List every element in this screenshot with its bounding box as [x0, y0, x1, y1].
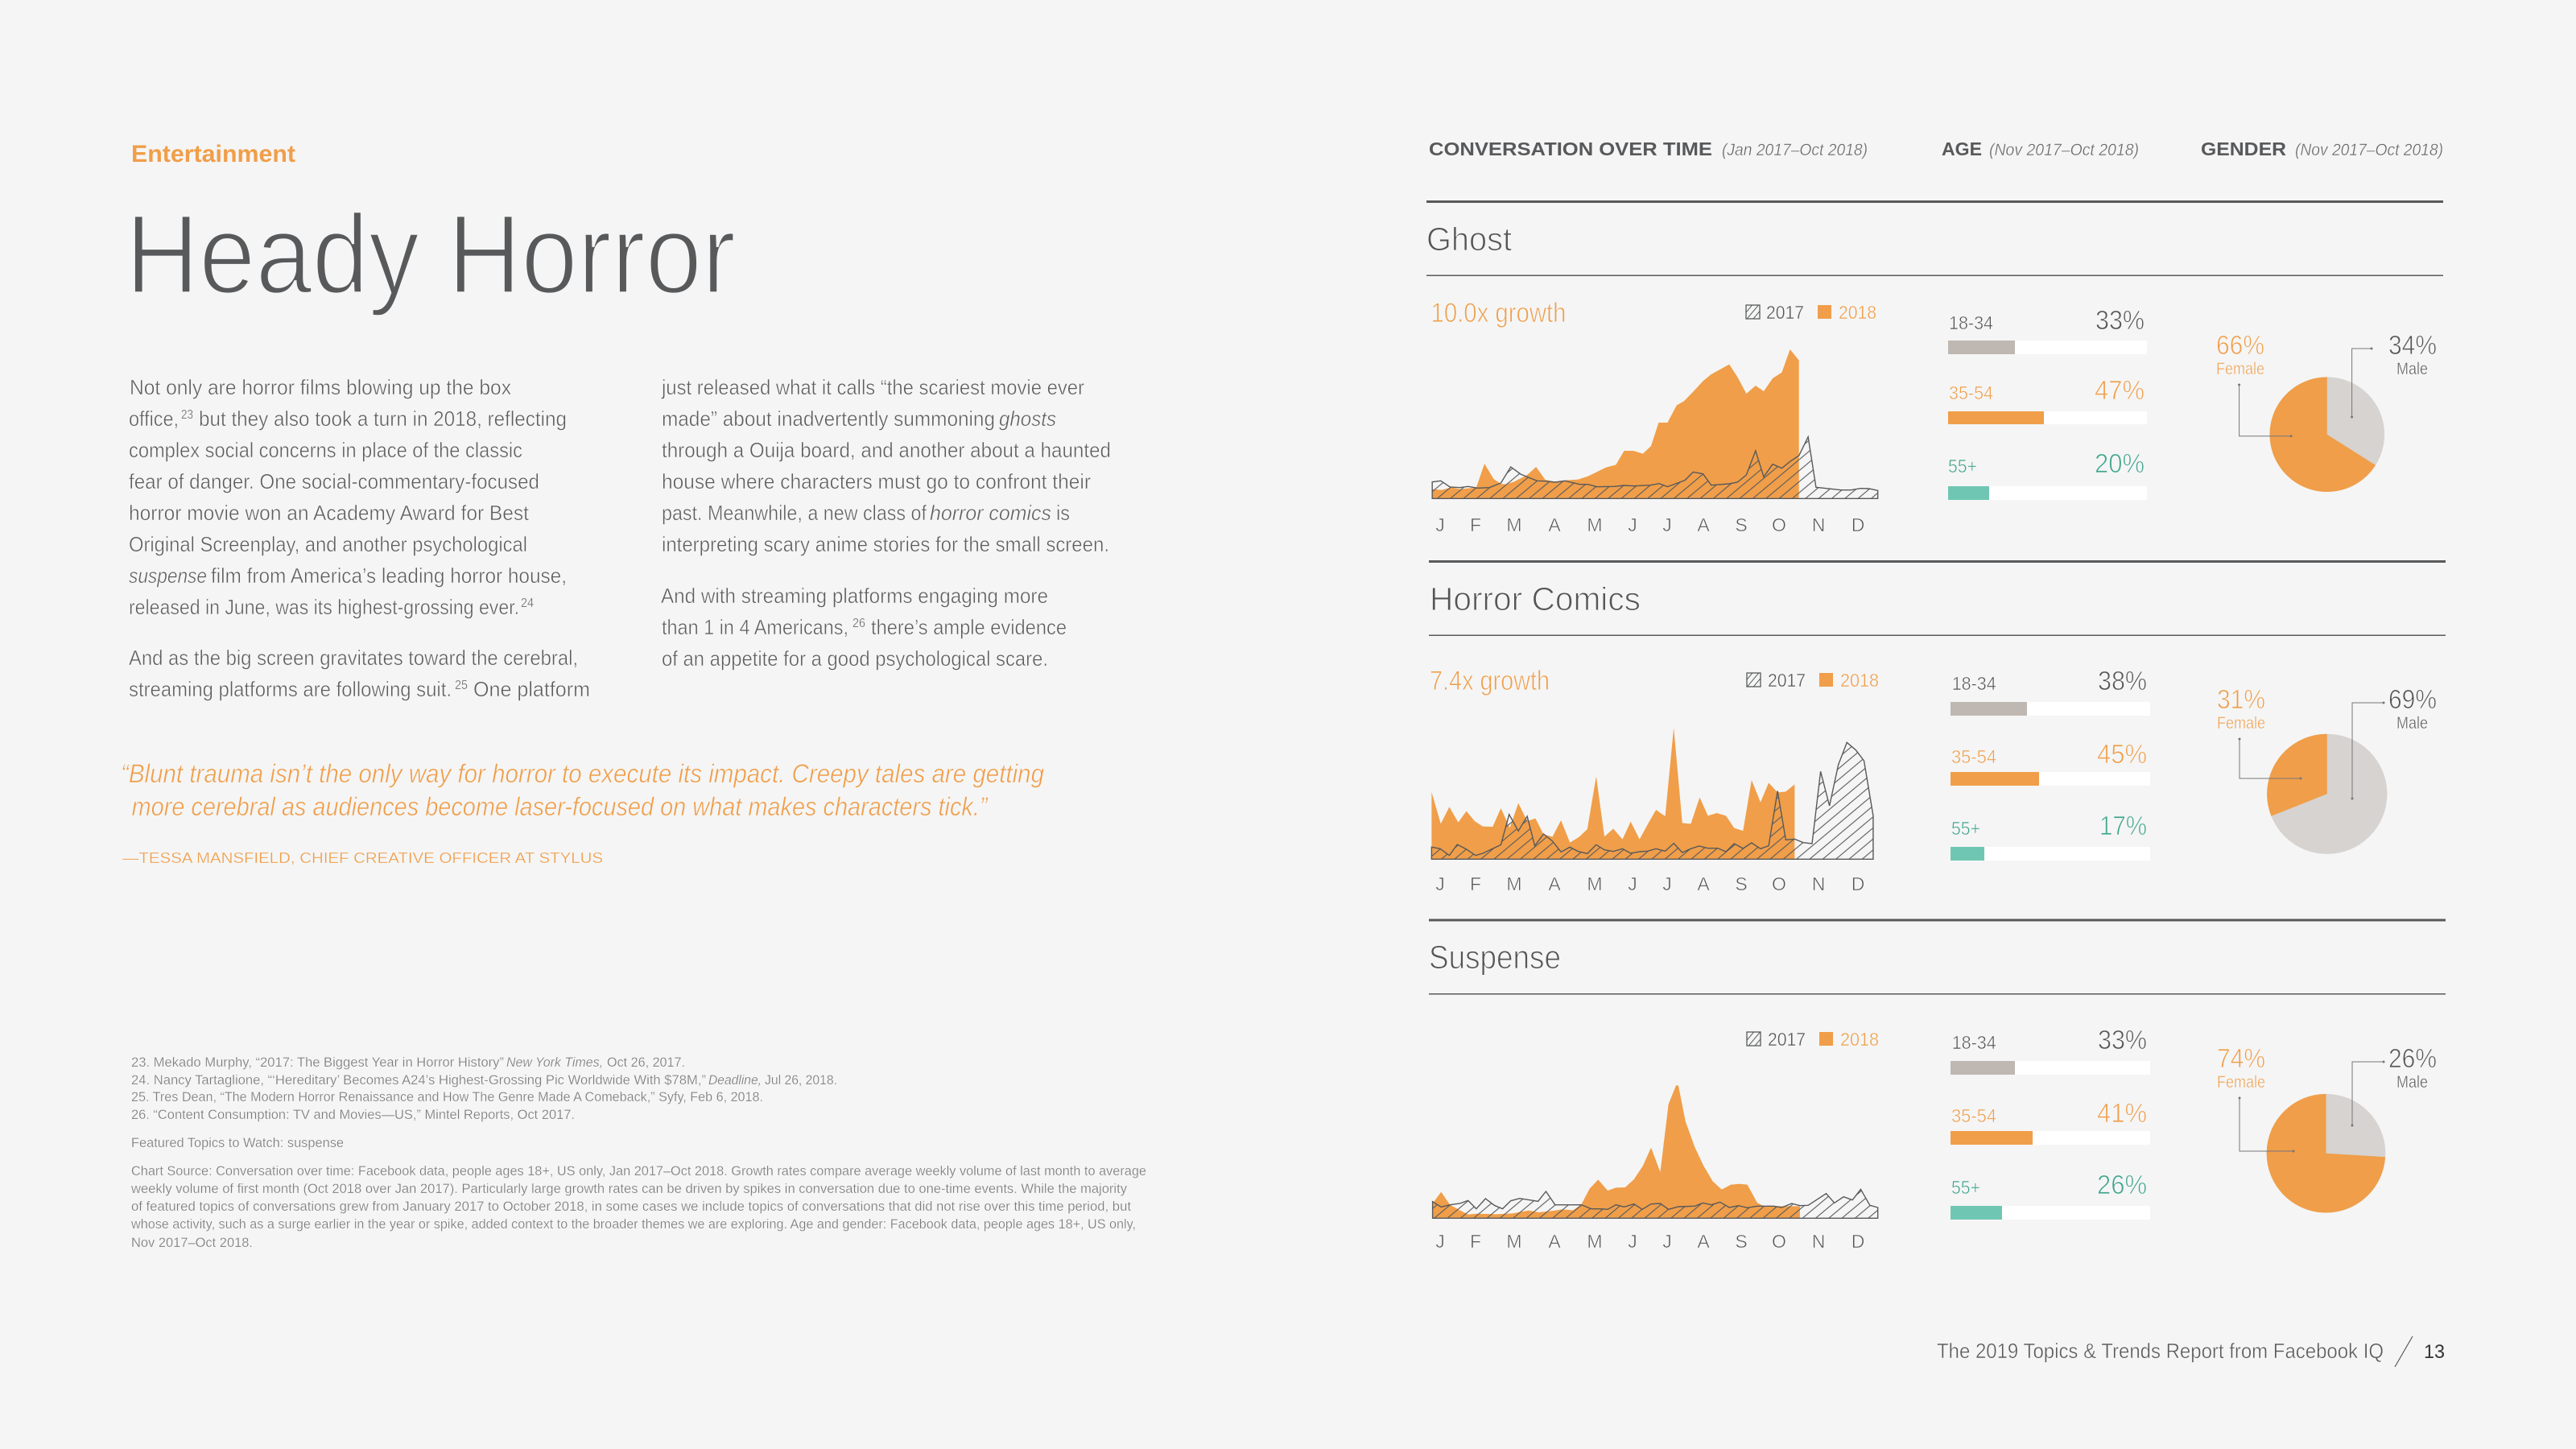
area chart: conversation over time: N: [1812, 514, 1825, 535]
area chart: conversation over time: D: [1852, 1231, 1864, 1252]
body text: right column: past. Meanwhile, a new class of: [662, 501, 927, 525]
area chart: conversation over time: A: [1697, 1231, 1710, 1252]
chart source note: [130, 1163, 1146, 1250]
area chart: conversation over time: N: [1812, 1231, 1825, 1252]
topic heading: Horror Comics: Horror Comics: [1430, 580, 1641, 617]
chart source note: of featured topics of conversations grew from January 2017 to October 2018, in some cases we include topics of conversations that did not rise over this time period, but: [131, 1199, 1131, 1214]
gender pie chart: Male: [2396, 1073, 2428, 1092]
growth label: 7.4x growth: [1430, 666, 1550, 696]
area chart: conversation over time: F: [1470, 1231, 1481, 1252]
topic heading: Ghost: Ghost: [1426, 221, 1513, 258]
footnotes: Oct 26, 2017.: [607, 1055, 685, 1070]
topic heading: Suspense: Suspense: [1429, 939, 1561, 976]
area chart: conversation over time: M: [1587, 1231, 1603, 1252]
area chart: conversation over time: A: [1548, 1231, 1561, 1252]
body text: right column: house where characters must go to confront their: [662, 469, 1091, 493]
body text: left column: released in June, was its highest-grossing ever.: [129, 595, 519, 619]
age bars: 45%: [2097, 739, 2147, 769]
age bars: 55+: [1948, 456, 1977, 477]
footnotes: New York Times,: [506, 1055, 603, 1070]
pull quote: [121, 759, 1044, 821]
area chart: conversation over time: J: [1628, 1231, 1637, 1252]
area chart: conversation over time: D: [1852, 514, 1864, 535]
chart legend: 2018: [1840, 670, 1879, 691]
category label: Entertainment: [131, 141, 295, 167]
gender pie chart: Female: [2216, 360, 2264, 378]
age bars: 33%: [2095, 305, 2145, 335]
body text: right column: [661, 375, 1111, 671]
footer: The 2019 Topics & Trends Report from Facebook IQ: [1937, 1339, 2384, 1363]
chart legend: 2017: [1768, 670, 1806, 691]
body text: right column: just released what it calls “the scariest movie ever: [661, 375, 1084, 399]
featured topics note: Featured Topics to Watch: suspense: [131, 1135, 344, 1150]
area chart: conversation over time: A: [1697, 514, 1710, 535]
area chart: conversation over time: J: [1662, 514, 1672, 535]
column headers: (Nov 2017–Oct 2018): [2295, 141, 2443, 159]
age bars: 18-34: [1952, 673, 1996, 694]
chart legend: 2017: [1766, 302, 1804, 323]
body text: left column: streaming platforms are following suit.: [129, 677, 452, 701]
gender pie chart: [2217, 684, 2437, 854]
area chart: conversation over time: A: [1548, 514, 1561, 535]
body text: right column: than 1 in 4 Americans,: [662, 615, 848, 639]
age bars: 35-54: [1951, 1105, 1996, 1126]
area chart: conversation over time: D: [1852, 873, 1864, 894]
footnotes: 24. Nancy Tartaglione, “‘Hereditary’ Becomes A24’s Highest-Grossing Pic Worldwide With $78M,”: [131, 1072, 706, 1088]
body text: left column: 24: [521, 597, 534, 610]
body text: left column: fear of danger. One social-commentary-focused: [129, 469, 539, 493]
body text: left column: complex social concerns in place of the classic: [129, 438, 522, 462]
body text: right column: made” about inadvertently summoning: [662, 407, 995, 431]
footnotes: 25. Tres Dean, “The Modern Horror Renaissance and How The Genre Made A Comeback,” Syfy, Feb 6, 2018.: [131, 1089, 763, 1104]
body text: left column: Not only are horror films blowing up the box: [130, 375, 511, 399]
area chart: conversation over time: [1429, 346, 1884, 535]
body text: left column: Original Screenplay, and another psychological: [129, 532, 527, 556]
chart source note: Nov 2017–Oct 2018.: [131, 1235, 253, 1250]
column headers: (Nov 2017–Oct 2018): [1989, 141, 2139, 159]
panel: Ghost: [1426, 221, 2437, 535]
gender pie chart: 26%: [2388, 1043, 2437, 1073]
gender pie chart: 69%: [2388, 684, 2437, 714]
age bars: 47%: [2095, 375, 2145, 405]
chart legend: 2017: [1768, 1029, 1806, 1050]
area chart: conversation over time: J: [1662, 1231, 1672, 1252]
gender pie chart: [2216, 330, 2437, 492]
age bars: 20%: [2095, 448, 2145, 478]
column headers: (Jan 2017–Oct 2018): [1722, 141, 1868, 159]
gender pie chart: Female: [2217, 714, 2265, 733]
pull quote: “Blunt trauma isn’t the only way for horror to execute its impact. Creepy tales are getting: [121, 759, 1044, 788]
age bars: [1951, 666, 2150, 861]
body text: left column: horror movie won an Academy Award for Best: [129, 501, 530, 525]
footer: 13: [2424, 1341, 2445, 1363]
area chart: conversation over time: S: [1735, 514, 1748, 535]
pull quote: more cerebral as audiences become laser-focused on what makes characters tick.”: [132, 792, 989, 821]
gender pie chart: 31%: [2217, 684, 2265, 714]
age bars: [1948, 305, 2147, 500]
chart source note: whose activity, such as a surge earlier in the year or spike, added context to the broader themes we are exploring. Age and gender: Facebook data, people ages 18+, US only,: [130, 1216, 1136, 1232]
body text: right column: there’s ample evidence: [871, 615, 1067, 639]
panel: Horror Comics: [1429, 580, 2437, 894]
chart source note: weekly volume of first month (Oct 2018 over Jan 2017). Particularly large growth rates can be driven by spikes in conversation due to one-time events. While the majority: [130, 1181, 1127, 1196]
gender pie chart: 34%: [2388, 330, 2437, 360]
age bars: 18-34: [1952, 1032, 1996, 1053]
body text: right column: is: [1056, 501, 1070, 525]
chart legend: [1747, 670, 1879, 691]
body text: left column: office,: [129, 407, 179, 431]
age bars: 26%: [2097, 1170, 2147, 1199]
area chart: conversation over time: S: [1735, 873, 1748, 894]
body text: left column: suspense: [129, 564, 207, 588]
area chart: conversation over time: A: [1548, 873, 1561, 894]
area chart: conversation over time: J: [1435, 514, 1445, 535]
area chart: conversation over time: N: [1812, 873, 1825, 894]
age bars: 17%: [2099, 811, 2147, 840]
age bars: 55+: [1951, 1177, 1980, 1198]
gender pie chart: Male: [2396, 360, 2428, 378]
body text: left column: 23: [181, 408, 193, 422]
body text: right column: 26: [852, 617, 865, 630]
age bars: [1951, 1025, 2150, 1220]
age bars: 38%: [2098, 666, 2147, 696]
body text: right column: ghosts: [999, 407, 1056, 431]
area chart: conversation over time: M: [1587, 514, 1603, 535]
footnotes: 23. Mekado Murphy, “2017: The Biggest Year in Horror History”: [131, 1055, 504, 1070]
area chart: conversation over time: M: [1506, 1231, 1522, 1252]
footnotes: Jul 26, 2018.: [765, 1072, 837, 1088]
age bars: 41%: [2097, 1098, 2147, 1128]
age bars: 35-54: [1949, 382, 1993, 403]
chart legend: 2018: [1839, 302, 1876, 323]
area chart: conversation over time: M: [1587, 873, 1603, 894]
body text: left column: film from America’s leading horror house,: [211, 564, 567, 588]
gender pie chart: Female: [2217, 1073, 2265, 1092]
area chart: conversation over time: J: [1435, 873, 1445, 894]
body text: left column: but they also took a turn in 2018, reflecting: [199, 407, 567, 431]
chart source note: Chart Source: Conversation over time: Facebook data, people ages 18+, US only, Jan 2017–Oct 2018. Growth rates compare average weekly volume of last month to average: [131, 1163, 1146, 1179]
gender pie chart: 74%: [2217, 1043, 2265, 1073]
age bars: 35-54: [1951, 746, 1996, 767]
age bars: 55+: [1951, 818, 1980, 839]
quote attribution: —TESSA MANSFIELD, CHIEF CREATIVE OFFICER AT STYLUS: [122, 849, 603, 866]
area chart: conversation over time: S: [1735, 1231, 1748, 1252]
area chart: conversation over time: J: [1628, 873, 1637, 894]
age bars: 18-34: [1949, 312, 1993, 333]
area chart: conversation over time: [1429, 1079, 1884, 1252]
area chart: conversation over time: O: [1772, 1231, 1786, 1252]
chart legend: 2018: [1840, 1029, 1879, 1050]
area chart: conversation over time: J: [1628, 514, 1637, 535]
area chart: conversation over time: J: [1435, 1231, 1445, 1252]
area chart: conversation over time: F: [1470, 873, 1481, 894]
title: Heady Horror: [126, 191, 736, 317]
area chart: conversation over time: [1429, 724, 1884, 894]
column headers: [1429, 138, 2443, 159]
footnotes: 26. “Content Consumption: TV and Movies—US,” Mintel Reports, Oct 2017.: [131, 1107, 575, 1122]
footnotes: [131, 1055, 837, 1122]
panel: Suspense: [1429, 939, 2437, 1252]
body text: left column: [129, 375, 590, 701]
body text: right column: through a Ouija board, and another about a haunted: [662, 438, 1111, 462]
body text: left column: One platform: [473, 677, 590, 701]
area chart: conversation over time: M: [1506, 873, 1522, 894]
body text: right column: horror comics: [930, 501, 1051, 525]
chart legend: [1746, 302, 1876, 323]
area chart: conversation over time: M: [1506, 514, 1522, 535]
body text: left column: 25: [455, 679, 468, 692]
age bars: 33%: [2098, 1025, 2147, 1055]
gender pie chart: Male: [2396, 714, 2428, 733]
gender pie chart: 66%: [2216, 330, 2264, 360]
column headers: GENDER: [2201, 138, 2286, 159]
column headers: CONVERSATION OVER TIME: [1429, 138, 1712, 159]
infographic page: [122, 142, 2446, 1367]
chart legend: [1747, 1029, 1879, 1050]
footnotes: Deadline,: [708, 1072, 762, 1088]
body text: right column: And with streaming platforms engaging more: [661, 584, 1048, 608]
column headers: AGE: [1942, 138, 1982, 159]
area chart: conversation over time: J: [1662, 873, 1672, 894]
body text: left column: And as the big screen gravitates toward the cerebral,: [129, 646, 578, 670]
area chart: conversation over time: O: [1772, 514, 1786, 535]
growth label: 10.0x growth: [1431, 298, 1567, 328]
gender pie chart: [2217, 1043, 2437, 1212]
area chart: conversation over time: F: [1470, 514, 1481, 535]
area chart: conversation over time: A: [1697, 873, 1710, 894]
body text: right column: of an appetite for a good psychological scare.: [662, 646, 1048, 671]
body text: right column: interpreting scary anime stories for the small screen.: [662, 532, 1109, 556]
area chart: conversation over time: O: [1772, 873, 1786, 894]
